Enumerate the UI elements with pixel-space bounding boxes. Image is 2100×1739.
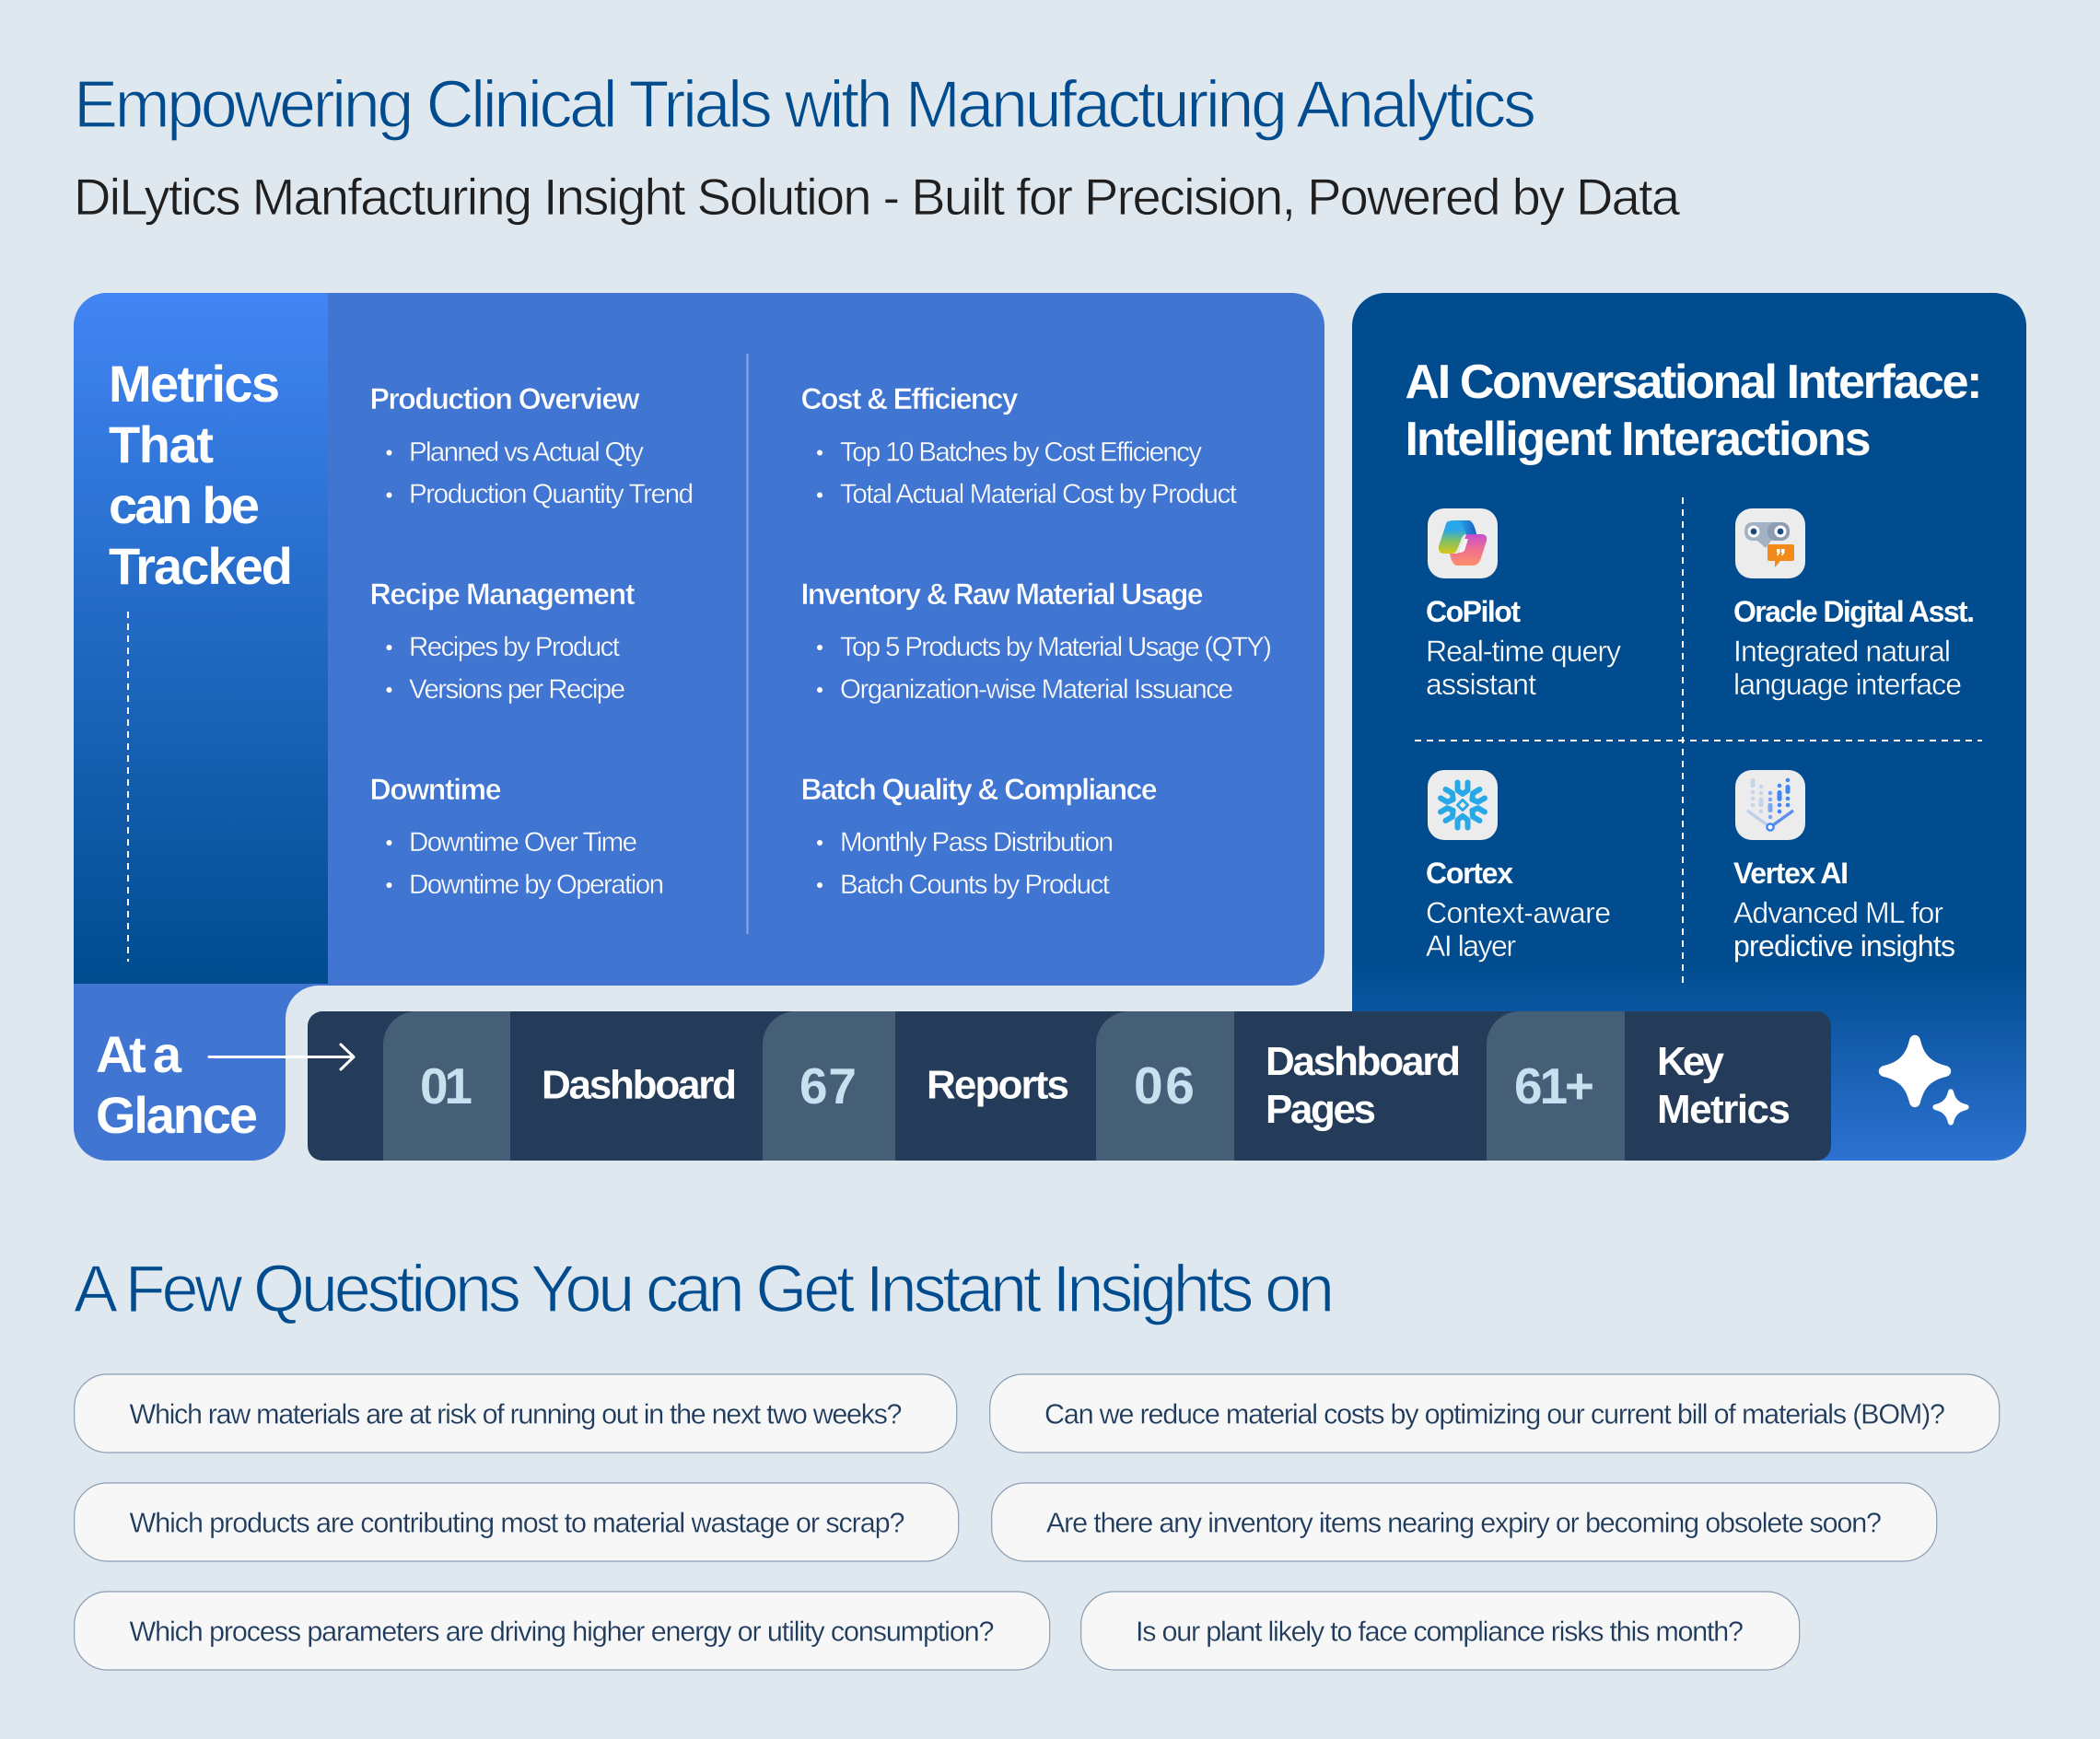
section: Inventory and Raw Material Usage: Top 5 Products by Material Usage (QTY) <box>840 632 1272 662</box>
section: Production Overview: Planned vs Actual Qty <box>409 437 644 468</box>
stat: 61+ Key Metrics: 61+ <box>1514 1057 1594 1115</box>
item: Oracle Digital Assistant: Integrated natural <box>1733 635 1951 668</box>
section: Batch Quality and Compliance: Batch Quality & Compliance <box>801 773 1157 806</box>
pill: inventory expiry: Are there any inventory items nearing expiry or becoming obsolete soon? <box>1046 1507 1882 1538</box>
title: Empowering Clinical Trials with Manufacturing Analytics <box>74 68 1536 142</box>
section: Cost and Efficiency: Total Actual Material Cost by Product <box>840 479 1237 509</box>
stat: 06 Dashboard Pages: 06 <box>1134 1056 1195 1115</box>
icon: Vertex AI <box>1735 770 1805 840</box>
stat: 01 Dashboard: Dashboard <box>542 1063 737 1107</box>
item: Oracle Digital Assistant: language interface <box>1733 668 1962 701</box>
section: Recipe Management: Recipe Management <box>370 578 636 611</box>
heading: questions: A Few Questions You can Get Instant Insights on <box>74 1253 1335 1326</box>
section: Inventory and Raw Material Usage: Organization-wise Material Issuance <box>840 674 1233 705</box>
section: Downtime: Downtime <box>370 773 501 806</box>
section: Downtime <box>370 773 664 900</box>
stat: 06 Dashboard Pages: Pages <box>1266 1087 1376 1132</box>
stat: 67 Reports <box>763 1011 1069 1161</box>
pill: energy consumption <box>75 1592 1050 1670</box>
pill: raw materials risk: Which raw materials are at risk of running out in the next two weeks? <box>129 1398 903 1430</box>
pill: energy consumption: Which process parameters are driving higher energy or utility consumption? <box>129 1616 995 1647</box>
section: Batch Quality and Compliance: Batch Counts by Product <box>840 870 1110 900</box>
sidebar: metrics heading: Metrics <box>109 355 280 413</box>
item: Vertex AI <box>1733 857 1955 963</box>
section: Batch Quality and Compliance <box>801 773 1157 900</box>
item: Cortex: AI layer <box>1426 929 1516 963</box>
pill: compliance risks: Is our plant likely to face compliance risks this month? <box>1136 1616 1744 1647</box>
section: Cost and Efficiency <box>801 382 1237 509</box>
heading: AI conversational interface <box>1406 356 1982 466</box>
sidebar: metrics heading: can be <box>109 476 260 534</box>
item: CoPilot <box>1426 595 1621 701</box>
section: Inventory and Raw Material Usage: Inventory & Raw Material Usage <box>801 578 1203 611</box>
sidebar: metrics heading: That <box>109 415 214 473</box>
section: Production Overview: Production Quantity Trend <box>409 479 694 509</box>
section: Recipe Management: Versions per Recipe <box>409 674 625 705</box>
heading: at a glance: Glance <box>96 1086 258 1144</box>
section: Inventory and Raw Material Usage <box>801 578 1272 705</box>
heading: AI conversational interface: AI Conversational Interface: <box>1406 356 1982 409</box>
pill: raw materials risk <box>75 1374 957 1453</box>
section: Recipe Management: Recipes by Product <box>409 632 620 662</box>
stat: 06 Dashboard Pages <box>1096 1011 1461 1161</box>
item: Oracle Digital Assistant: Oracle Digital Asst. <box>1733 595 1975 628</box>
pill: reduce material costs: Can we reduce material costs by optimizing our current bill of materials (BOM)? <box>1044 1398 1945 1430</box>
stat: 61+ Key Metrics <box>1487 1011 1791 1161</box>
sidebar: metrics heading: Tracked <box>109 537 293 595</box>
icon: Oracle Digital Assistant <box>1735 508 1805 578</box>
stat: 61+ Key Metrics: Metrics <box>1657 1087 1791 1132</box>
item: CoPilot: assistant <box>1426 668 1536 701</box>
item: Cortex: Cortex <box>1426 857 1513 890</box>
sidebar: metrics heading <box>74 293 328 984</box>
icon: sparkles <box>1879 1035 1969 1126</box>
section: Production Overview <box>370 382 694 509</box>
pill: compliance risks <box>1081 1592 1800 1670</box>
item: Cortex <box>1426 857 1611 963</box>
stat: 06 Dashboard Pages: Dashboard <box>1266 1039 1461 1084</box>
stat: 61+ Key Metrics: Key <box>1657 1039 1725 1084</box>
stats bar <box>209 1011 1831 1161</box>
section: Cost and Efficiency: Top 10 Batches by Cost Efficiency <box>840 437 1202 468</box>
section: Recipe Management <box>370 578 636 705</box>
pill: inventory expiry <box>992 1483 1937 1561</box>
stat: 01 Dashboard: 01 <box>420 1057 472 1115</box>
icon: CoPilot <box>1428 508 1498 578</box>
item: CoPilot: CoPilot <box>1426 595 1521 628</box>
heading: at a glance: At a <box>96 1025 182 1083</box>
item: Vertex AI: Advanced ML for <box>1733 896 1943 929</box>
section: Downtime: Downtime Over Time <box>409 827 637 858</box>
section: Downtime: Downtime by Operation <box>409 870 664 900</box>
item: Vertex AI: Vertex AI <box>1733 857 1849 890</box>
item: Cortex: Context-aware <box>1426 896 1611 929</box>
heading: at a glance <box>96 1025 258 1144</box>
stat: 67 Reports: 67 <box>799 1057 857 1115</box>
section: Production Overview: Production Overview <box>370 382 640 415</box>
pill: material wastage <box>75 1483 959 1561</box>
section: Cost and Efficiency: Cost & Efficiency <box>801 382 1019 415</box>
panel: AI conversational interface <box>1352 293 2026 1161</box>
item: CoPilot: Real-time query <box>1426 635 1621 668</box>
panel: metrics that can be tracked <box>74 293 1324 1161</box>
pill: material wastage: Which products are contributing most to material wastage or scrap? <box>129 1507 905 1538</box>
stat: 67 Reports: Reports <box>927 1063 1069 1107</box>
item: Vertex AI: predictive insights <box>1733 929 1955 963</box>
icon: Cortex snowflake <box>1428 770 1498 840</box>
item: Oracle Digital Assistant <box>1733 595 1975 701</box>
arrow <box>209 1045 354 1069</box>
section: Batch Quality and Compliance: Monthly Pass Distribution <box>840 827 1114 858</box>
subtitle: DiLytics Manfacturing Insight Solution - Built for Precision, Powered by Data <box>74 168 1681 226</box>
heading: AI conversational interface: Intelligent Interactions <box>1406 413 1872 466</box>
stat: 01 Dashboard <box>383 1011 737 1161</box>
pill: reduce material costs <box>990 1374 2000 1453</box>
question pills <box>75 1374 2000 1670</box>
